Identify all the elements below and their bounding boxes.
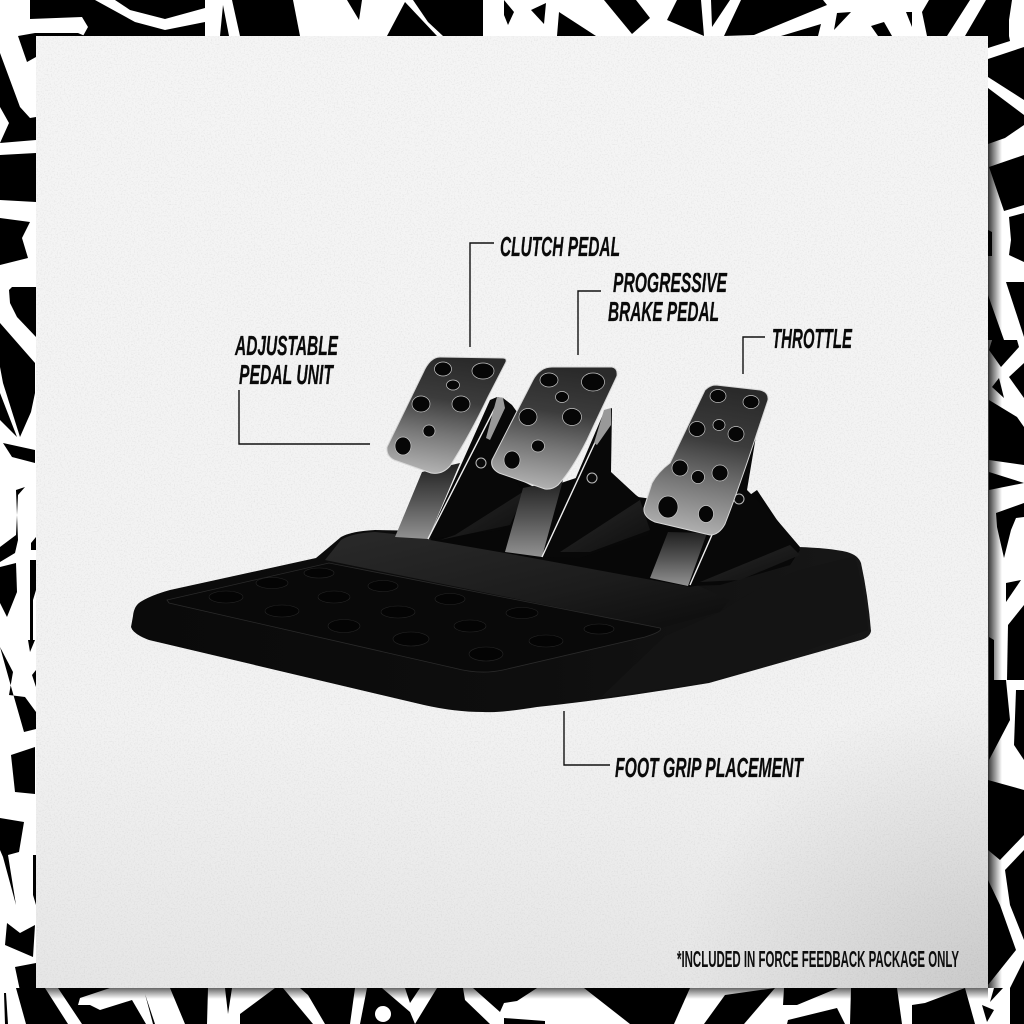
- callout: adjustable pedal unit: ADJUSTABLE: [234, 330, 339, 361]
- callout: clutch pedal: CLUTCH PEDAL: [500, 231, 620, 262]
- foot plate: [167, 563, 661, 672]
- callout: progressive brake pedal: BRAKE PEDAL: [608, 296, 719, 327]
- callout: progressive brake pedal: [578, 267, 728, 355]
- callout: foot grip placement: FOOT GRIP PLACEMENT: [615, 752, 805, 783]
- callout: throttle: [743, 323, 853, 374]
- bottom border strip: [16, 988, 1024, 1024]
- callout: foot grip placement: [564, 711, 805, 783]
- right wedge: [600, 556, 868, 698]
- top border strip: [18, 0, 1012, 36]
- callout: clutch pedal: [470, 231, 620, 347]
- clutch pedal: [387, 357, 540, 540]
- dark pedal housing behind the arms: [430, 470, 800, 587]
- callout: adjustable pedal unit: [234, 330, 370, 444]
- raised heel section: [325, 532, 730, 628]
- progressive brake pedal: [492, 367, 660, 558]
- callout: adjustable pedal unit: PEDAL UNIT: [239, 359, 335, 390]
- right border strip: [988, 36, 1024, 1024]
- pedal base: [131, 470, 871, 712]
- throttle pedal: [644, 385, 800, 586]
- callout: throttle: THROTTLE: [772, 323, 853, 354]
- pedal unit illustration: [131, 357, 871, 712]
- callout: progressive brake pedal: PROGRESSIVE: [613, 267, 728, 298]
- left border strip: [0, 36, 36, 1024]
